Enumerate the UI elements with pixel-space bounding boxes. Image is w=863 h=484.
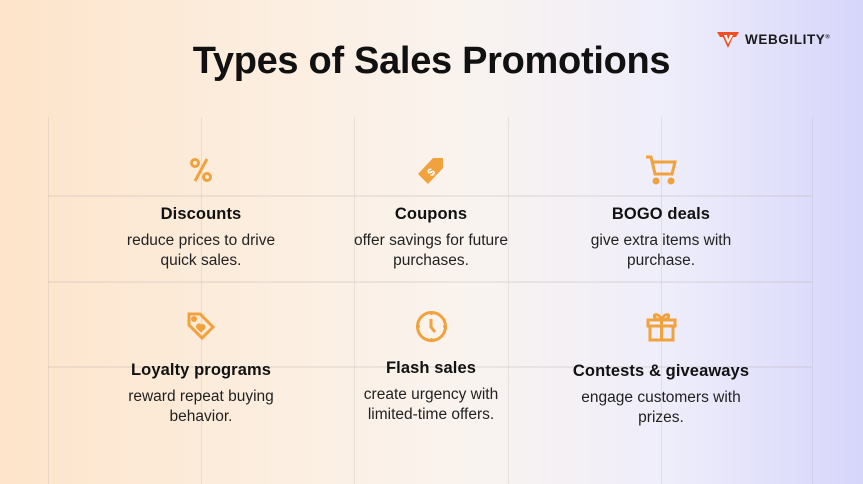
cell: Flash sales: Flash sales <box>386 359 476 377</box>
cell: BOGO <box>591 205 731 268</box>
title: Types of Sales Promotions <box>193 40 670 82</box>
cell: Contests <box>573 362 749 426</box>
cell: Discounts: Discounts <box>161 205 241 223</box>
icon: gift <box>646 313 676 342</box>
cell: Flash sales: create urgency with <box>364 386 498 403</box>
cell: Coupons: purchases. <box>393 252 469 268</box>
cell: Contests: engage customers with <box>581 389 741 406</box>
cell: Discounts: reduce prices to drive <box>127 232 275 249</box>
cell: Contests: prizes. <box>638 408 684 426</box>
cell: Contests: Contests & giveaways <box>573 362 749 380</box>
cell: BOGO: give extra items with <box>591 232 731 249</box>
cell: Coupons <box>354 205 508 268</box>
cell: BOGO: purchase. <box>627 252 695 268</box>
cell: Loyalty: behavior. <box>170 408 232 424</box>
cell: Loyalty <box>128 361 274 424</box>
icon: coupon tag: $ <box>425 166 438 179</box>
cell: Loyalty: Loyalty programs <box>131 361 271 379</box>
icon: clock <box>416 311 447 342</box>
icon: cart <box>646 156 677 184</box>
icon: percent <box>190 158 212 182</box>
cell: Coupons: offer savings for future <box>354 232 508 249</box>
cell: Flash sales: limited-time offers. <box>368 406 494 422</box>
cell: Discounts <box>127 205 275 268</box>
cell: Coupons: Coupons <box>395 205 467 223</box>
icon: coupon tag <box>418 158 443 184</box>
cell: Flash sales <box>364 359 498 422</box>
cell: Discounts: quick sales. <box>160 252 241 268</box>
icon: heart tag <box>188 312 215 340</box>
cell: Loyalty: reward repeat buying <box>128 388 274 405</box>
logo: WEBGILITY® <box>745 32 830 47</box>
cell: BOGO: BOGO deals <box>612 205 710 223</box>
